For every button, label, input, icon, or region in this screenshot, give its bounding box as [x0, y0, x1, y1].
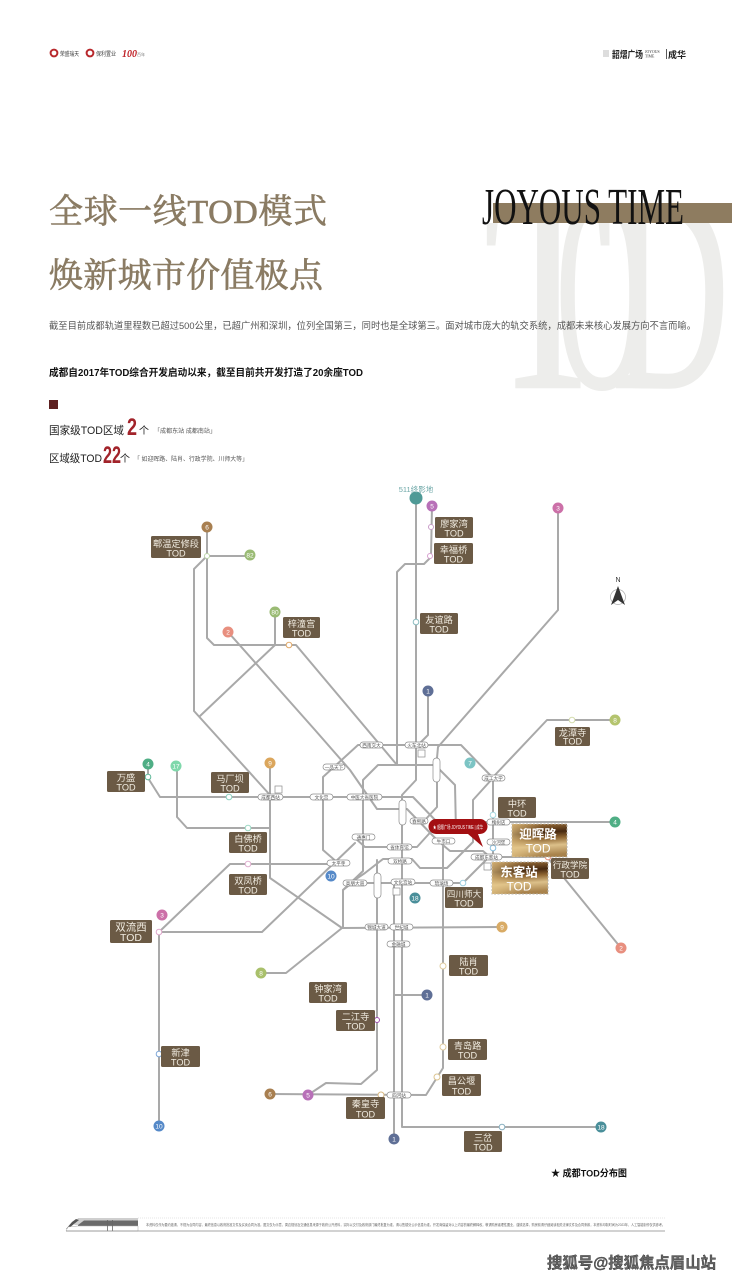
TOD label: 陆肖: TOD [459, 966, 478, 976]
TOD label: 四川师大: TOD [454, 898, 474, 908]
TOD label: 行政学院: TOD [560, 869, 580, 879]
regional TOD count: 区域级TOD [49, 452, 102, 465]
TOD station dots [145, 524, 575, 1130]
TOD label: 行政学院: 行政学院 [553, 859, 588, 870]
TOD label: 钟家湾: 钟家湾 [314, 983, 342, 994]
line end markers: 8 [259, 970, 263, 978]
header logos left: 荣盛瑞天 [60, 50, 79, 58]
station name pills: 四河站 [392, 1092, 406, 1099]
station name pills: 文化宫 [315, 794, 329, 801]
location pin: project callout [428, 819, 488, 847]
TOD label: 四川师大: 四川师大 [447, 888, 482, 899]
TOD label: 新津: TOD [171, 1057, 190, 1067]
line end markers: 4 [613, 820, 617, 826]
regional TOD count: 22 [103, 442, 121, 469]
line end markers: 8 [613, 718, 617, 724]
location pin: project callout: ★ 韶熠广场 JOYOUS TIME | 成华 [433, 823, 483, 831]
TOD label: 双流西 [110, 920, 152, 944]
station name pills: 琉璃场 [435, 880, 449, 887]
TOD label: 二江寺 [336, 1010, 375, 1031]
station name pills: 牛市口 [437, 838, 451, 845]
TOD label: 中环 [498, 797, 536, 818]
line end markers: 1 [426, 688, 430, 696]
footer rule bottom [66, 1230, 665, 1232]
TOD label: 二江寺: TOD [346, 1021, 365, 1031]
station name pills: 中医大省医院 [351, 794, 379, 801]
TOD label: 梓潼宫 [283, 617, 320, 638]
station name pills: 西南交大 [362, 742, 381, 749]
line end markers: 1 [425, 992, 429, 1000]
station name pills [258, 742, 510, 1099]
TOD label: 钟家湾 [309, 982, 347, 1003]
highlighted TOD: 东客站: TOD [506, 880, 532, 894]
line end markers: 5 [430, 504, 434, 510]
north arrow: N [615, 577, 621, 584]
station name pills: 一品天下 [325, 765, 344, 771]
TOD label: 陆肖: 陆肖 [459, 956, 478, 967]
header logo right: 韶熠广场 [612, 49, 643, 61]
line end markers: 82 [246, 552, 254, 560]
TOD label: 龙潭寺: TOD [563, 736, 582, 746]
station name pills: 火车北站 [407, 742, 426, 749]
line end markers: 7 [468, 760, 472, 768]
regional TOD count: 「 如迎晖路、陆肖、行政学院、川师大等」 [134, 455, 248, 463]
TOD label: 郫温定修段: TOD [166, 548, 186, 558]
header logos left [51, 49, 145, 60]
TOD label: 三岔: TOD [473, 1142, 493, 1152]
intro paragraph: 截至目前成都轨道里程数已超过500公里，已超广州和深圳，位列全国第三，同时也是全球第三。面对城市庞大的轨交系统，成都未来核心发展方向不言而喻。 [49, 320, 696, 332]
line end markers [142, 492, 626, 1144]
TOD label: 马厂坝 [211, 772, 249, 793]
national TOD count: 「成都东站 成都南站」 [154, 427, 216, 435]
metro map [107, 484, 626, 1152]
line end markers: 17 [172, 764, 180, 770]
JOYOUS TIME bar [493, 203, 732, 223]
TOD label: 马厂坝: 马厂坝 [216, 774, 244, 784]
line end markers: 18 [597, 1124, 605, 1132]
TOD label: 青岛路: TOD [458, 1050, 477, 1060]
header logos left: 百年 [137, 51, 145, 57]
TOD label: 廖家湾: 廖家湾 [440, 518, 468, 529]
highlighted TOD: 迎晖路: 迎晖路 [519, 826, 557, 842]
TOD label: 三岔 [464, 1131, 502, 1152]
national TOD count: 国家级TOD区域 [49, 423, 124, 437]
TOD label: 廖家湾 [435, 517, 473, 538]
TOD label: 昌公堰: 昌公堰 [448, 1076, 475, 1086]
TOD label: 幸福桥: TOD [444, 554, 463, 564]
TOD label: 马厂坝: TOD [220, 783, 240, 793]
TOD label: 秦皇寺: TOD [356, 1109, 375, 1119]
station name pills: 太平寺 [332, 860, 346, 867]
TOD label: 幸福桥 [434, 543, 473, 564]
station name pills: 世纪城 [395, 924, 409, 931]
highlighted TOD: 东客站: 东客站 [500, 864, 538, 880]
TOD label: 双流西: 双流西 [115, 921, 147, 934]
TOD label: 青岛路 [448, 1039, 487, 1060]
line end markers: 10 [155, 1124, 163, 1130]
metro lines [148, 498, 621, 1139]
footer train icon [66, 1218, 138, 1231]
watermark: 搜狐号@搜狐焦点眉山站 [547, 1253, 716, 1272]
regional TOD count [49, 442, 248, 469]
line end markers: 80 [271, 610, 279, 616]
line end markers: 4 [146, 762, 150, 768]
line end markers: 9 [500, 924, 504, 932]
header logo right: JOYOUS [645, 50, 660, 54]
regional TOD count: 个 [120, 453, 130, 465]
header logos left: 100 [122, 49, 137, 60]
TOD label: 双流西: TOD [120, 932, 142, 944]
TOD label: 中环: 中环 [508, 798, 526, 809]
header logo right: 成华 [668, 49, 686, 60]
station name pills: 槐树店 [492, 819, 506, 826]
station name pills: 通惠门 [357, 834, 371, 841]
TOD label: 二江寺: 二江寺 [342, 1012, 369, 1022]
TOD label: 白佛桥 [229, 832, 267, 853]
station name pills: 锦城大道 [367, 924, 386, 931]
station name pills: 双桥路 [393, 858, 407, 865]
footer rule top [138, 1217, 665, 1219]
national TOD count [49, 414, 216, 441]
highlighted TOD: 东客站 [492, 862, 548, 894]
line end markers: 3 [556, 506, 560, 512]
red square marker [49, 400, 58, 409]
TOD label: 郫温定修段: 郫温定修段 [153, 538, 199, 549]
TOD label: 白佛桥: 白佛桥 [234, 833, 262, 844]
TOD label: 友谊路: 友谊路 [425, 614, 453, 625]
TOD label: 廖家湾: TOD [444, 528, 464, 538]
TOD label: 钟家湾: TOD [318, 993, 338, 1003]
line end markers: 1 [392, 1136, 396, 1144]
TOD label: 龙潭寺: 龙潭寺 [559, 727, 586, 738]
header logo right [603, 49, 686, 61]
line end markers: 10 [327, 874, 335, 880]
TOD label: 新津: 新津 [171, 1047, 190, 1058]
north arrow [610, 577, 626, 605]
terminus label 511: 511终影地 [399, 484, 434, 494]
header logo right: TIME [645, 54, 655, 58]
TOD label: 幸福桥: 幸福桥 [440, 544, 467, 555]
station name pills: 沙河堡 [492, 839, 506, 845]
TOD label: 行政学院 [551, 858, 589, 879]
TOD label: 中环: TOD [507, 808, 527, 818]
TOD label: 万盛: TOD [116, 782, 136, 792]
TOD label: 万盛: 万盛 [117, 772, 135, 783]
TOD label: 昌公堰 [442, 1074, 481, 1096]
TOD label: 昌公堰: TOD [452, 1086, 471, 1096]
TOD label: 梓潼宫: 梓潼宫 [288, 618, 315, 629]
station name pills: 成工大学 [484, 775, 503, 782]
TOD label: 梓潼宫: TOD [292, 628, 311, 638]
station name pills: 成都东客站 [475, 854, 498, 861]
title: 焕新城市价值极点 [48, 257, 324, 295]
national TOD count: 2 [127, 414, 137, 441]
title: 全球一线TOD模式 [49, 193, 327, 231]
TOD label: 双凤桥: TOD [238, 885, 258, 895]
national TOD count: 个 [139, 425, 149, 437]
TOD label: 万盛 [107, 771, 145, 792]
TOD label: 陆肖 [449, 955, 488, 976]
station name pills: 成都西站 [261, 794, 280, 801]
line end markers: 6 [268, 1092, 272, 1098]
station name pills: 文化宫站 [394, 879, 413, 886]
TOD label: 龙潭寺 [555, 727, 590, 746]
line end markers: 6 [205, 524, 209, 532]
TOD label: 双凤桥 [229, 874, 267, 895]
header logos left: 保利置业 [96, 50, 116, 58]
background TOD lettering [487, 223, 723, 391]
line end markers: 18 [411, 896, 419, 902]
line end markers: 9 [268, 760, 272, 768]
map caption: ★ 成都TOD分布图 [551, 1168, 627, 1180]
title [48, 193, 327, 295]
TOD label: 四川师大 [445, 887, 483, 908]
bold statement: 成都自2017年TOD综合开发启动以来，截至目前共开发打造了20余座TOD [49, 366, 363, 379]
background TOD lettering: T [484, 133, 612, 449]
station name pills: 春熙路 [412, 818, 426, 825]
line end markers: 2 [226, 630, 230, 636]
TOD label: 秦皇寺: 秦皇寺 [352, 1098, 379, 1109]
line end markers: 2 [619, 946, 623, 952]
TOD label: 新津 [161, 1046, 200, 1067]
station name pills: 省体育馆 [390, 844, 409, 851]
station name pills: 金融城 [392, 941, 406, 948]
TOD label: 双凤桥: 双凤桥 [234, 875, 262, 886]
line end markers: 3 [160, 912, 164, 920]
line end markers: 5 [306, 1092, 310, 1100]
TOD label: 秦皇寺 [346, 1097, 385, 1119]
TOD label: 白佛桥: TOD [238, 843, 258, 853]
TOD label: 三岔: 三岔 [474, 1133, 492, 1143]
TOD label: 郫温定修段 [151, 536, 201, 558]
highlighted TOD: 迎晖路 [512, 824, 567, 857]
TOD label: 青岛路: 青岛路 [454, 1040, 481, 1051]
TOD label: 友谊路: TOD [429, 624, 449, 634]
highlighted TOD: 迎晖路: TOD [525, 842, 551, 856]
station name pills: 高朋大道 [346, 880, 365, 887]
TOD label: 友谊路 [420, 613, 458, 634]
